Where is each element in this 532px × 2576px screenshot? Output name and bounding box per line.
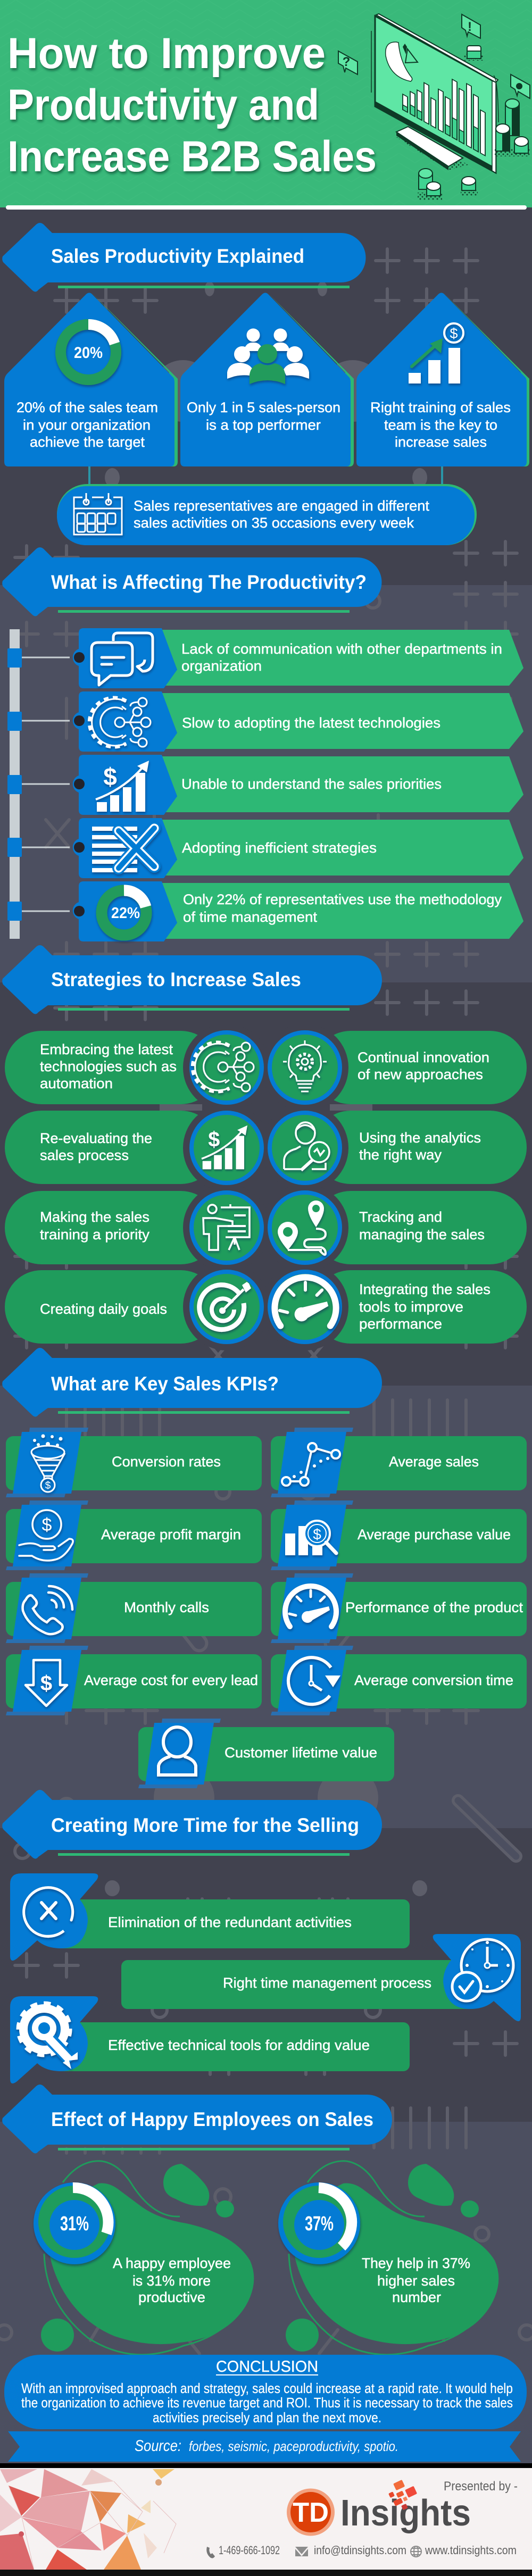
KPI: performance of the product <box>271 1573 527 1643</box>
presented by: Presented by - <box>444 2479 518 2494</box>
row: inefficient strategies: Adopting inefficient strategies <box>182 840 377 856</box>
callout: 35 occasions every week <box>57 484 477 545</box>
icon: down arrow dollar <box>26 1660 67 1706</box>
strategy: tracking and managing <box>278 1201 485 1255</box>
contact details: www.tdinsights.com <box>425 2544 517 2557</box>
KPI: customer lifetime value <box>138 1719 394 1788</box>
panel: right training of sales team: increase sales <box>395 434 487 450</box>
strategy: making training a priority: Making the sales <box>40 1209 149 1225</box>
icon: growth chart with coin: $ <box>450 326 458 341</box>
KPI: average cost for every lead: Average cost for every lead <box>84 1672 258 1688</box>
illustration: isometric blocks <box>418 46 530 200</box>
panel: 1 in 5 top performer: is a top performer <box>206 417 321 433</box>
panel: 20% of the sales team: 20% of the sales team <box>16 399 158 415</box>
icon: team of people <box>227 329 309 384</box>
strategy: embracing technologies <box>40 1041 254 1091</box>
strategy: making training a priority <box>40 1204 250 1250</box>
row: lack of communication <box>73 628 523 688</box>
footer <box>0 2463 532 2576</box>
section heading: Creating More Time for the Selling <box>2 1790 382 1858</box>
icon: funnel <box>31 1434 65 1492</box>
icon: calendar <box>74 493 122 535</box>
callout: 35 occasions every week: Sales representatives are engaged in different <box>134 498 429 514</box>
KPI: monthly calls: Monthly calls <box>124 1599 209 1615</box>
KPI: average sales <box>271 1428 527 1497</box>
strategy rows: pills <box>5 1031 527 1344</box>
row: inefficient strategies <box>73 818 523 878</box>
icon: speedometer <box>285 1586 336 1627</box>
row: right time management <box>121 1934 521 2021</box>
KPI: customer lifetime value: Customer lifetime value <box>225 1745 377 1761</box>
strategy: creating daily goals: Creating daily goals <box>40 1301 167 1317</box>
icon: funnel: $ <box>45 1480 51 1491</box>
panel: 31% more productive: productive <box>138 2289 205 2305</box>
panel: 37% higher sales number <box>278 2161 498 2355</box>
row: 22% time management: of time management <box>183 909 318 925</box>
icon: x in circle <box>24 1888 73 1937</box>
row: elimination of redundant activities: Elimination of the redundant activities <box>108 1914 352 1930</box>
icon: phone <box>206 2547 215 2558</box>
row: 22% time management <box>73 881 523 941</box>
donut arc: 31% <box>73 2188 108 2233</box>
row: lack of communication: Lack of communication with other departments in <box>181 641 502 657</box>
conclusion panel: CONCLUSION <box>216 2358 318 2375</box>
strategy: creating daily goals <box>40 1282 251 1330</box>
header banner <box>0 0 532 210</box>
connector lines <box>89 466 442 485</box>
KPI: average profit margin <box>6 1500 262 1570</box>
strategy: re-evaluating the sales process: Re-evaluating the <box>40 1130 152 1146</box>
KPI: average sales: Average sales <box>389 1454 479 1470</box>
icon: clock with arrow <box>288 1657 340 1704</box>
icon: person <box>159 1727 196 1775</box>
icon: bars with magnifier: $ <box>313 1526 321 1543</box>
icon: line chart <box>282 1443 340 1486</box>
strategy: re-evaluating the sales process <box>40 1126 247 1169</box>
icon: coin in hand: $ <box>42 1515 52 1535</box>
icon: globe <box>411 2546 421 2557</box>
row: slow to adopt technologies <box>73 691 523 752</box>
strategy: integrating the sales tools: Integrating the sales <box>359 1281 491 1297</box>
icon: gear and wrench <box>19 2004 78 2069</box>
icon: speedometer <box>275 1277 336 1326</box>
strategy: embracing technologies: technologies such as <box>40 1058 177 1074</box>
section heading: Effect of Happy Employees on Sales <box>2 2085 392 2153</box>
section heading: What is Affecting The Productivity?: What is Affecting The Productivity? <box>51 571 367 593</box>
strategy: using the analytics: Using the analytics <box>359 1130 481 1146</box>
panel: 37% higher sales number: number <box>392 2289 441 2305</box>
panel: 1 in 5 top performer: Only 1 in 5 sales-person <box>187 399 340 415</box>
strategy: continual innovation: Continual innovation <box>358 1049 489 1065</box>
strategy: integrating the sales tools: tools to improve <box>359 1299 463 1315</box>
panel: right training of sales team <box>356 293 529 466</box>
contact details: info@tdinsights.com <box>314 2544 406 2557</box>
illustration: floating speech bubbles: ? <box>343 55 350 69</box>
logo: TD Insights <box>287 2477 471 2536</box>
strategy medallions <box>183 1024 348 1350</box>
strategy: using the analytics <box>284 1122 481 1170</box>
strategy: continual innovation: of new approaches <box>358 1066 483 1082</box>
donut arc: 37% <box>319 2188 352 2247</box>
icon: clock with check <box>452 1939 513 2001</box>
strategy: embracing technologies: automation <box>40 1076 113 1091</box>
panel: right training of sales team: team is the key to <box>384 417 497 433</box>
contact details: 1-469-666-1092 <box>219 2544 280 2557</box>
row: effective technical tools: Effective technical tools for adding value <box>108 2037 370 2053</box>
icon: gear network <box>89 698 151 747</box>
panel: 20% of the sales team <box>4 293 178 466</box>
KPI: conversion rates: Conversion rates <box>112 1454 221 1470</box>
icon: phone with signal <box>23 1586 72 1634</box>
row: sales priorities: Unable to understand the sales priorities <box>181 776 442 792</box>
source ribbon: forbes, seismic, paceproductivity, spotio. <box>189 2438 398 2454</box>
row: elimination of redundant activities <box>10 1873 410 1961</box>
icon: envelope <box>295 2547 308 2556</box>
section heading: Strategies to Increase Sales: Strategies to Increase Sales <box>51 969 301 990</box>
icon: trainer at board <box>203 1204 250 1250</box>
icon: route with pins <box>278 1201 326 1255</box>
icon: analyst with magnifier <box>284 1122 329 1170</box>
icon: crossed list <box>92 828 154 870</box>
icon: dollar growth chart <box>202 1126 247 1169</box>
conclusion panel: activities precisely and plan the next move. <box>153 2410 381 2425</box>
strategy: making training a priority: training a priority <box>40 1227 150 1243</box>
panel: 37% higher sales number: 37% <box>305 2213 334 2235</box>
timeline rail <box>7 629 70 939</box>
KPI: performance of the product: Performance of the product <box>345 1599 523 1615</box>
section heading: What are Key Sales KPIs? <box>2 1348 382 1417</box>
strategy: using the analytics: the right way <box>359 1147 442 1163</box>
logo: TD Insights: Insights <box>340 2492 471 2533</box>
KPI: average profit margin: Average profit margin <box>101 1527 241 1543</box>
icon: bars with magnifier <box>285 1521 336 1555</box>
strategy: re-evaluating the sales process: sales process <box>40 1147 129 1163</box>
KPI: average conversion time: Average conversion time <box>354 1672 513 1688</box>
panel: 37% higher sales number: They help in 37% <box>362 2255 470 2271</box>
title: How to Improve <box>7 29 326 78</box>
icon: dollar growth chart <box>96 761 149 812</box>
panel: 20% of the sales team: 20% <box>74 344 103 362</box>
KPI: average cost for every lead <box>6 1646 262 1715</box>
row: lack of communication: organization <box>181 658 262 674</box>
icon: gear network <box>193 1043 254 1091</box>
row: effective technical tools <box>10 1996 410 2083</box>
strategy: integrating the sales tools <box>275 1277 491 1332</box>
icon: speech bubbles <box>92 633 153 685</box>
panel: right training of sales team: Right training of sales <box>370 399 511 415</box>
illustration: floating speech bubbles <box>338 14 530 98</box>
strategy: tracking and managing: managing the sales <box>359 1227 485 1243</box>
donut chart: 22% <box>102 890 146 935</box>
title: Increase B2B Sales <box>7 132 377 181</box>
logo: TD Insights: TD <box>293 2497 329 2528</box>
KPI: average purchase value <box>271 1500 527 1570</box>
contact details <box>206 2544 517 2558</box>
row: slow to adopt technologies: Slow to adopting the latest technologies <box>182 715 440 731</box>
illustration: monitor with charts <box>371 14 498 173</box>
illustration: floating speech bubbles: ! <box>468 20 472 34</box>
panel: 31% more productive: A happy employee <box>113 2255 231 2271</box>
section heading: What are Key Sales KPIs?: What are Key Sales KPIs? <box>51 1373 279 1395</box>
icon: light bulb with gear <box>283 1040 327 1091</box>
conclusion panel <box>4 2355 527 2429</box>
row: right time management: Right time management process <box>223 1975 431 1991</box>
strategy: integrating the sales tools: performance <box>359 1316 442 1332</box>
section heading: Sales Productivity Explained <box>2 223 365 291</box>
section heading: Creating More Time for the Selling: Creating More Time for the Selling <box>51 1814 359 1836</box>
KPI: average conversion time <box>271 1646 527 1715</box>
panel: 31% more productive <box>34 2161 254 2355</box>
source ribbon <box>8 2431 521 2462</box>
KPI: average purchase value: Average purchase value <box>358 1527 511 1543</box>
row: 22% time management: 22% <box>111 905 140 922</box>
row: 22% time management: Only 22% of representatives use the methodology <box>183 891 502 907</box>
source ribbon: Source: <box>135 2437 181 2455</box>
strategy: tracking and managing: Tracking and <box>359 1209 442 1225</box>
KPI: conversion rates <box>6 1428 262 1497</box>
panel: 31% more productive: is 31% more <box>132 2273 211 2289</box>
KPI: monthly calls <box>6 1573 262 1643</box>
title <box>7 29 377 181</box>
icon: target with arrow <box>200 1282 251 1330</box>
icon: down arrow dollar: $ <box>40 1672 52 1695</box>
panel: 37% higher sales number: higher sales <box>377 2273 455 2289</box>
callout: 35 occasions every week: sales activities on 35 occasions every week <box>134 515 414 531</box>
panel: 20% of the sales team: achieve the target <box>30 434 145 450</box>
strategy: embracing technologies: Embracing the latest <box>40 1041 173 1057</box>
decorative low-poly triangles <box>0 2469 176 2570</box>
strategy: continual innovation <box>283 1040 489 1091</box>
section heading: Sales Productivity Explained: Sales Productivity Explained <box>51 245 304 267</box>
row: sales priorities <box>73 755 523 815</box>
panel: 31% more productive: 31% <box>60 2213 89 2235</box>
panel: 20% of the sales team: in your organization <box>23 417 151 433</box>
donut chart: 20% <box>61 324 116 380</box>
panel: 1 in 5 top performer <box>180 293 354 466</box>
icon: coin in hand <box>19 1510 73 1561</box>
section heading: Effect of Happy Employees on Sales: Effect of Happy Employees on Sales <box>51 2108 373 2130</box>
section heading: What is Affecting The Productivity? <box>2 547 381 616</box>
section heading: Strategies to Increase Sales <box>2 945 382 1014</box>
title: Productivity and <box>7 81 319 129</box>
icon: growth chart with coin <box>409 323 463 384</box>
